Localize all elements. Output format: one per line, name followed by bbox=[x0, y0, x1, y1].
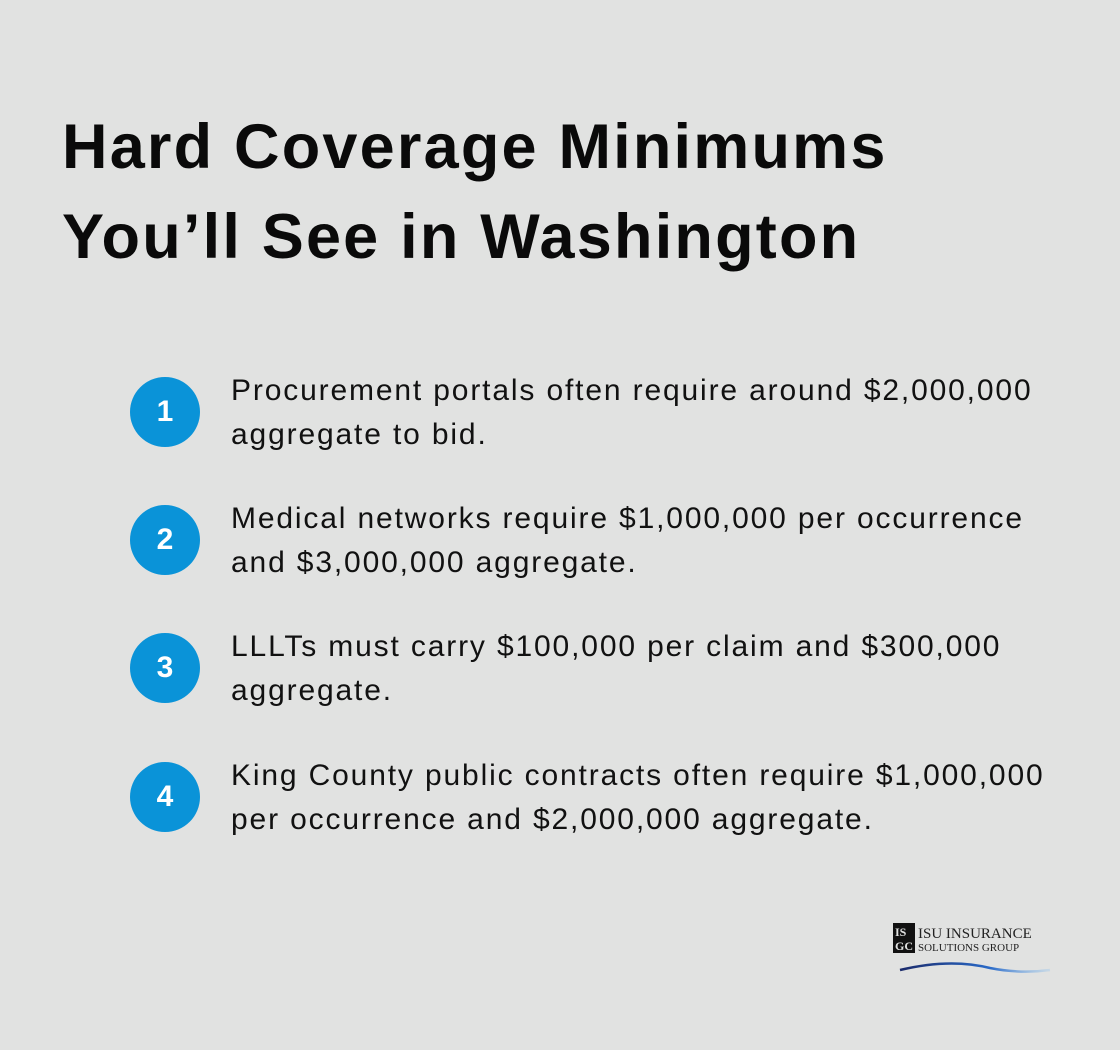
number badge 2: 2 bbox=[157, 523, 173, 556]
item 1 bbox=[130, 374, 1032, 451]
number badge 1: 1 bbox=[157, 395, 173, 428]
text 1: aggregate to bid. bbox=[231, 418, 488, 451]
text 1: Procurement portals often require around $2,000,000 bbox=[231, 374, 1032, 407]
text 2: and $3,000,000 aggregate. bbox=[231, 546, 638, 579]
text 3 bbox=[231, 630, 1001, 707]
logo: SOLUTIONS GROUP bbox=[918, 942, 1019, 954]
item 3 bbox=[130, 630, 1001, 707]
number badge 4 bbox=[130, 762, 200, 832]
title: You’ll See in Washington bbox=[62, 202, 860, 272]
logo: ISU INSURANCE bbox=[918, 926, 1032, 942]
logo: GC bbox=[895, 939, 913, 953]
number badge 3: 3 bbox=[157, 651, 173, 684]
text 1 bbox=[231, 374, 1032, 451]
logo: IS bbox=[895, 925, 907, 939]
title: Hard Coverage Minimums bbox=[62, 112, 888, 182]
item 4 bbox=[130, 759, 1045, 836]
text 4: King County public contracts often require $1,000,000 bbox=[231, 759, 1045, 792]
title bbox=[62, 112, 888, 272]
number badge 3 bbox=[130, 633, 200, 703]
number badge 2 bbox=[130, 505, 200, 575]
item 2 bbox=[130, 502, 1024, 579]
text 2 bbox=[231, 502, 1024, 579]
text 3: aggregate. bbox=[231, 674, 393, 707]
text 4 bbox=[231, 759, 1045, 836]
text 3: LLLTs must carry $100,000 per claim and $300,000 bbox=[231, 630, 1001, 663]
logo bbox=[893, 923, 1050, 973]
number badge 4: 4 bbox=[157, 780, 173, 813]
text 4: per occurrence and $2,000,000 aggregate. bbox=[231, 803, 874, 836]
number badge 1 bbox=[130, 377, 200, 447]
text 2: Medical networks require $1,000,000 per occurrence bbox=[231, 502, 1024, 535]
